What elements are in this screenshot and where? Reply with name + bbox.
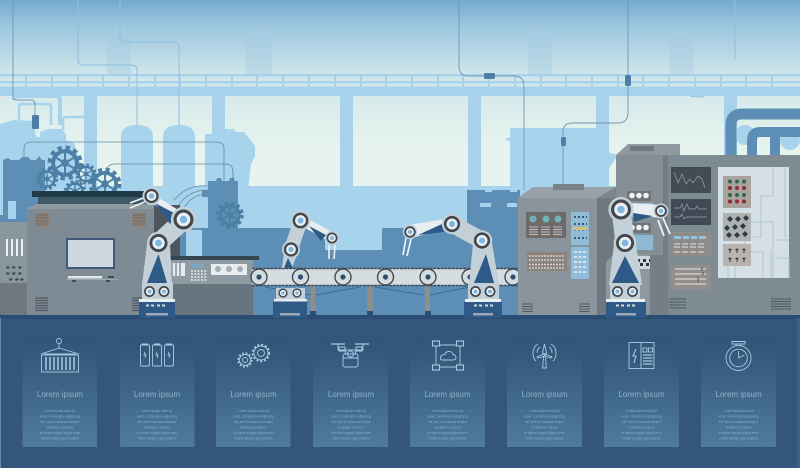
body text: Lorem ipsum dolor sit — [626, 409, 657, 413]
panel: card 1 container — [22, 335, 97, 447]
body text: incididunt ut labore — [628, 426, 655, 430]
panel: card 6 wind turbine — [507, 335, 582, 447]
body text: elit, sed do eiusmod tempor — [428, 420, 468, 424]
machine: main press with monitor — [27, 191, 180, 318]
icon: shipping container — [41, 338, 79, 372]
body text: Lorem ipsum dolor sit — [142, 409, 172, 413]
connecting cables to cog block — [24, 142, 233, 208]
blue readout panel — [571, 247, 589, 279]
body text: incididunt ut labore — [531, 426, 558, 430]
icon: batteries — [140, 344, 174, 366]
monitor — [67, 239, 114, 268]
body text: minim veniam quis nostrud — [235, 436, 273, 440]
body text: amet, consectetur adipiscing — [137, 414, 177, 418]
pipes upper right — [731, 114, 800, 156]
body text: incididunt ut labore — [434, 426, 461, 430]
body text: et dolore magna aliqua enim — [427, 431, 468, 435]
body text: incididunt ut labore — [240, 426, 267, 430]
icon: stopwatch — [726, 342, 751, 370]
panel: card 4 drone — [313, 335, 388, 447]
body text: elit, sed do eiusmod tempor — [525, 420, 565, 424]
icon: cloud network — [432, 341, 464, 370]
heading: Lorem ipsum — [715, 390, 762, 399]
body text: minim veniam quis nostrud — [526, 436, 564, 440]
body text: minim veniam quis nostrud — [41, 436, 79, 440]
background: factory hall sky — [0, 0, 800, 320]
toggle switches — [723, 244, 751, 266]
body text: elit, sed do eiusmod tempor — [331, 420, 372, 424]
dial strips — [627, 191, 653, 250]
panel: card 7 power panel — [604, 335, 679, 447]
body text: elit, sed do eiusmod tempor — [40, 420, 81, 424]
icon: gears — [238, 345, 269, 367]
body text: Lorem ipsum dolor sit — [238, 409, 269, 413]
body text: Lorem ipsum dolor sit — [432, 409, 463, 413]
switch panel blue — [571, 212, 589, 245]
control panel — [671, 232, 711, 256]
body text: minim veniam quis nostrud — [138, 436, 176, 440]
body text: et dolore magna aliqua enim — [331, 431, 371, 435]
machine: left side cabinet — [0, 222, 28, 318]
heading: Lorem ipsum — [618, 390, 665, 399]
body text: elit, sed do eiusmod tempor — [622, 420, 662, 424]
body text: elit, sed do eiusmod tempor — [234, 420, 274, 424]
floor panel — [0, 315, 800, 468]
body text: et dolore magna aliqua enim — [40, 431, 80, 435]
body text: Lorem ipsum dolor sit — [336, 409, 366, 413]
light silhouette: tanks and far machinery — [0, 96, 800, 320]
panel: card 5 cloud network — [410, 335, 485, 447]
key grid — [527, 252, 567, 271]
body text: minim veniam quis nostrud — [623, 436, 661, 440]
diamond switches — [723, 213, 751, 241]
overhead gantry bridge — [0, 74, 800, 196]
machine: centre-right cabinet — [518, 184, 616, 318]
conveyor rollers — [251, 269, 521, 285]
top light cables — [78, 0, 735, 126]
body text: et dolore magna aliqua enim — [621, 431, 662, 435]
body text: et dolore magna aliqua enim — [524, 431, 565, 435]
icon: power panel — [629, 342, 654, 368]
icon: wind turbine — [533, 344, 556, 368]
body text: amet, consectetur adipiscing — [331, 414, 371, 418]
machine: low control unit — [168, 256, 259, 318]
icon: drone — [331, 344, 369, 367]
body text: minim veniam quis nostrud — [720, 436, 758, 440]
robot arm 1 — [130, 187, 196, 318]
robot arm 3 — [403, 214, 502, 318]
heading: Lorem ipsum — [521, 390, 568, 399]
conveyor belt — [251, 268, 521, 318]
body text: amet, consectetur adipiscing — [524, 414, 565, 418]
machine: right tall cabinet with screens — [606, 144, 800, 318]
gear cluster — [37, 148, 242, 227]
body text: incididunt ut labore — [338, 426, 365, 430]
body text: amet, consectetur adipiscing — [233, 414, 274, 418]
body text: Lorem ipsum dolor sit — [723, 409, 754, 413]
body text: elit, sed do eiusmod tempor — [719, 420, 759, 424]
panel: card 8 stopwatch — [701, 335, 776, 447]
screen: line chart one — [671, 167, 711, 193]
body text: amet, consectetur adipiscing — [718, 414, 759, 418]
keyboard — [66, 276, 118, 282]
body text: Lorem ipsum dolor sit — [529, 409, 560, 413]
heading: Lorem ipsum — [328, 390, 374, 399]
body text: minim veniam quis nostrud — [332, 436, 370, 440]
panel: card 2 batteries — [120, 335, 194, 447]
top dark cables with junction boxes — [13, 0, 631, 190]
body text: elit, sed do eiusmod tempor — [137, 420, 178, 424]
screen: line chart two — [671, 199, 711, 225]
body text: minim veniam quis nostrud — [429, 436, 467, 440]
body text: et dolore magna aliqua enim — [137, 431, 177, 435]
body text: amet, consectetur adipiscing — [40, 414, 80, 418]
body text: amet, consectetur adipiscing — [427, 414, 468, 418]
heading: Lorem ipsum — [134, 390, 180, 399]
indicator lights — [723, 176, 751, 208]
body text: et dolore magna aliqua enim — [718, 431, 759, 435]
body text: et dolore magna aliqua enim — [233, 431, 274, 435]
body text: Lorem ipsum dolor sit — [45, 409, 75, 413]
body text: incididunt ut labore — [144, 426, 171, 430]
heading: Lorem ipsum — [230, 390, 277, 399]
slider panel — [671, 265, 711, 289]
mid-blue silhouette: plant behind the line — [0, 156, 520, 320]
slanted console — [606, 254, 663, 318]
robot arm 4 — [606, 197, 670, 318]
body text: incididunt ut labore — [47, 426, 74, 430]
gauges panel — [526, 212, 566, 238]
wiring board — [718, 167, 789, 278]
robot arm 2 — [273, 211, 339, 318]
body text: incididunt ut labore — [725, 426, 752, 430]
body text: amet, consectetur adipiscing — [621, 414, 662, 418]
heading: Lorem ipsum — [37, 390, 83, 399]
pale windows — [8, 188, 517, 257]
heading: Lorem ipsum — [424, 390, 471, 399]
panel: card 3 gears — [216, 335, 290, 447]
